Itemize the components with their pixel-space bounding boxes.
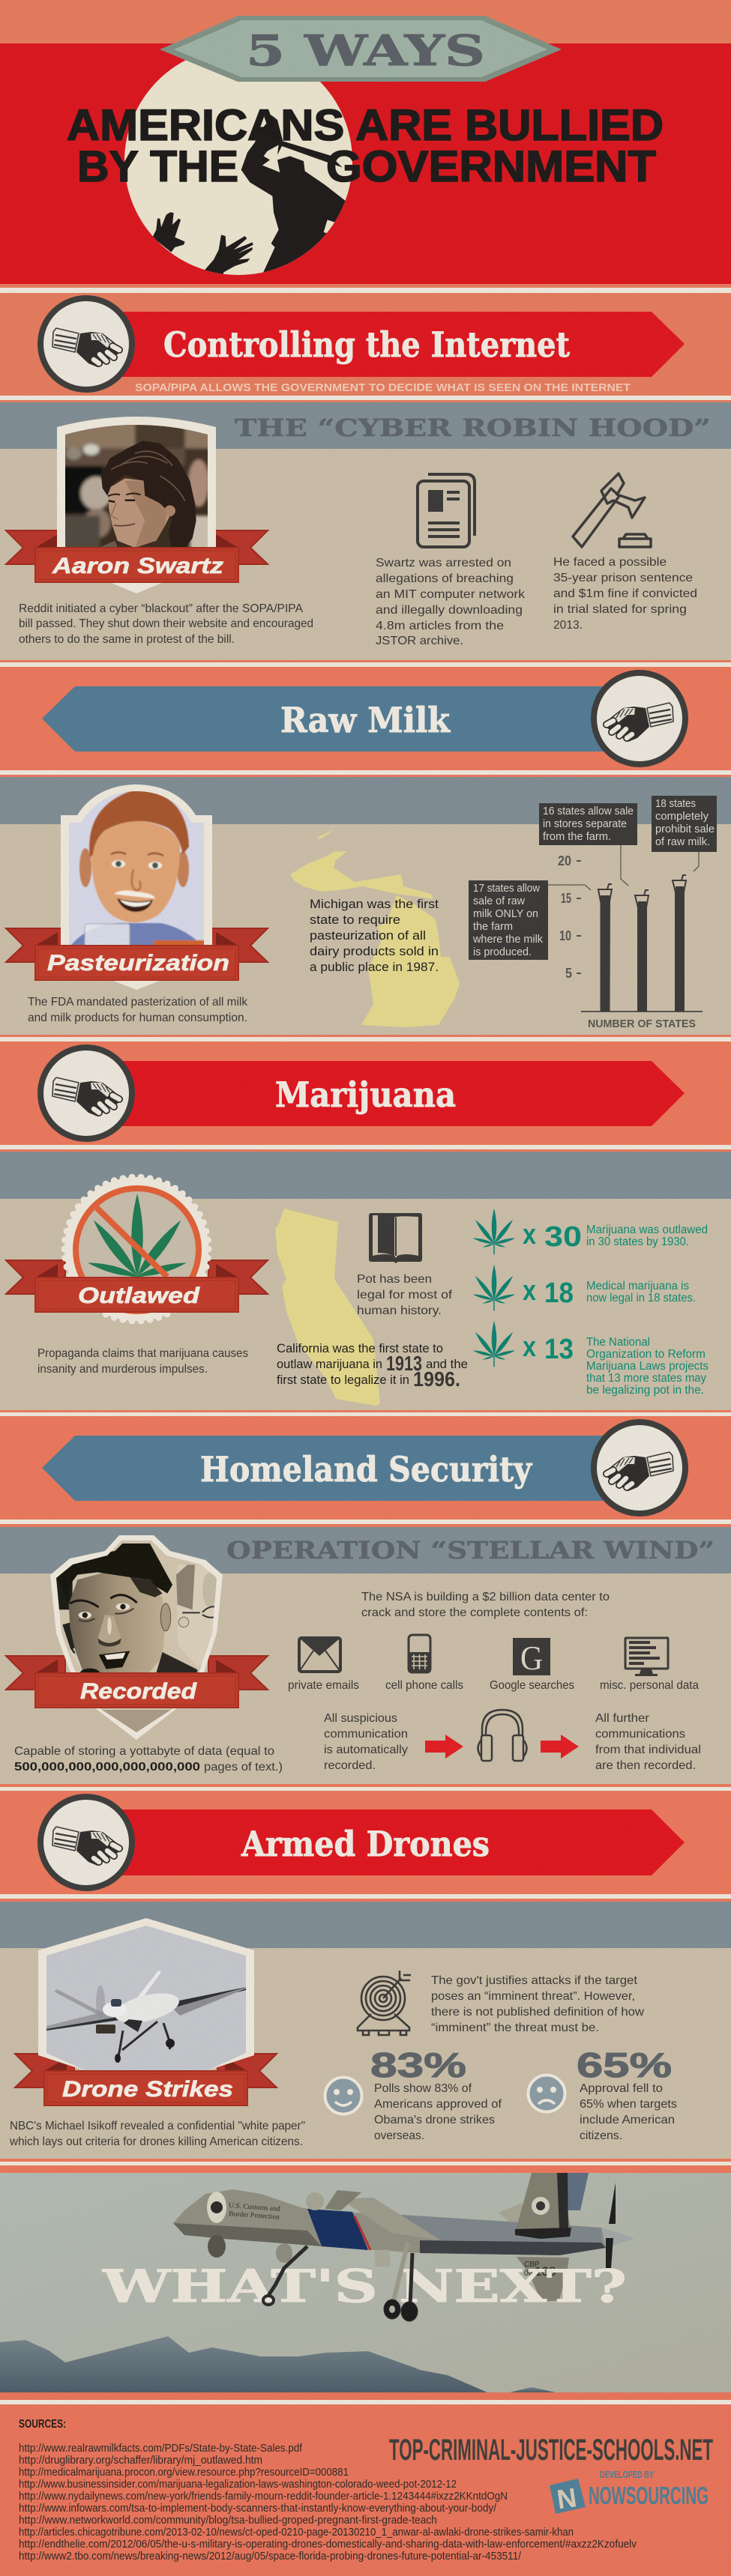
panel: cyber robin hood [0, 402, 731, 660]
text: propaganda: Propaganda claims that marijuana causes [37, 1347, 248, 1360]
icon: google searches [490, 1638, 574, 1692]
heading: Controlling the Internet [163, 324, 571, 365]
text: sentence [553, 556, 697, 632]
stat: 83% approval: Obama's drone strikes [374, 2114, 495, 2126]
text: sentence: 2013. [553, 619, 583, 632]
illustration: mountains [0, 2336, 556, 2392]
callout: 18 states: 18 states [655, 797, 696, 810]
stat: x 30: 30 [544, 1221, 582, 1253]
text: arrest [376, 557, 526, 647]
icon: personal data: misc. personal data [600, 1679, 699, 1692]
heading: sources: SOURCES: [19, 2418, 66, 2431]
logo: nowsourcing: N [555, 2482, 579, 2515]
callout: 18 states: of raw milk. [655, 835, 710, 848]
banner: 5 ways [160, 16, 562, 82]
icon: private emails: private emails [288, 1679, 359, 1692]
list: source urls: http://endthelie.com/2012/06/05/the-u-s-military-is-operating-drones-domestically-and-sharing-data-with-law-enforcement/#axzz2Kzofuelv [19, 2539, 637, 2551]
text: arrest: an MIT computer network [376, 588, 526, 601]
stat: 65% approval: include American [580, 2114, 675, 2126]
callout: 17 states: the farm [473, 920, 513, 933]
illustration: drone landing gear [263, 2243, 418, 2321]
callout: 16 states: 16 states allow sale [543, 805, 634, 817]
text: yottabyte: 500,000,000,000,000,000,000 [14, 1761, 200, 1774]
callout: 17 states [469, 880, 548, 960]
icon: frown [528, 2075, 565, 2111]
text: California: California was the first state to [277, 1341, 443, 1355]
icon: documents [418, 474, 475, 547]
stat: 83% approval: 83% [370, 2046, 466, 2084]
bar: 16 states [635, 890, 649, 1012]
text: further communications: communications [595, 1728, 685, 1741]
text: sentence: 35-year prison sentence [553, 572, 693, 584]
callout: 16 states: from the farm. [543, 830, 611, 843]
callout: 17 states: milk ONLY on [473, 907, 538, 920]
text: sentence: in trial slated for spring [553, 603, 687, 616]
bar chart: number of states [558, 853, 703, 1030]
callout: 16 states: in stores separate [543, 817, 627, 830]
text: arrest: Swartz was arrested on [376, 557, 511, 569]
text: imminent threat: “imminent” the threat must be. [431, 2022, 599, 2034]
callout: 17 states: where the milk [472, 933, 543, 946]
map: Michigan [290, 829, 460, 1027]
text: NSA [361, 1591, 610, 1619]
stat: x 18: Medical marijuana is [586, 1280, 689, 1292]
list: source urls: http://www.nydailynews.com/new-york/friends-family-mourn-reddit-founder-article-1.1243444#ixzz2KKntdOgN [19, 2491, 508, 2503]
ribbon: drone strikes: Drone Strikes [62, 2077, 233, 2102]
text: white paper: NBC's Michael Isikoff revealed a confidential "white paper" [10, 2120, 305, 2132]
icon: headphones [478, 1710, 526, 1761]
stat: x 13: be legalizing pot in the. [586, 1384, 704, 1397]
icon: private emails [288, 1638, 359, 1692]
text: pot history: Pot has been [357, 1273, 432, 1286]
icon: cell phone calls: cell phone calls [385, 1679, 463, 1692]
axis labels: 15 [561, 891, 571, 906]
text: FDA: The FDA mandated pasterization of all milk [28, 996, 248, 1009]
ribbon: drone strikes [44, 2071, 247, 2105]
subheading: SOPA/PIPA ALLOWS THE GOVERNMENT TO DECIDE WHAT IS SEEN ON THE INTERNET [135, 381, 631, 394]
icon: gavel [573, 474, 651, 547]
bar: 17 states [598, 884, 612, 1012]
stat: 65% approval: 65% [577, 2046, 672, 2084]
panel: homeland security header [0, 1410, 731, 1527]
illustration: border patrol drone: U.S. Customs and [229, 2202, 280, 2213]
stat: x 30: Marijuana was outlawed [586, 1224, 708, 1236]
panel: controlling the internet header [0, 284, 731, 402]
callout: 17 states: sale of raw [473, 895, 525, 907]
arrow [425, 1735, 463, 1759]
stat: 83% approval: Americans approved of [374, 2098, 502, 2111]
stat: x 13: Marijuana Laws projects [586, 1360, 709, 1373]
icon: fist badge [40, 1797, 132, 1888]
icon: target [358, 1971, 411, 2035]
ribbon: outlawed: Outlawed [78, 1284, 200, 1308]
text: California: 1913 [386, 1352, 422, 1375]
text: Michigan: dairy products sold in [310, 944, 439, 958]
stat: x 13 [472, 1320, 709, 1397]
callout: 18 states: completely [655, 810, 709, 823]
icon: fist badge [40, 1047, 132, 1139]
text: FDA: and milk products for human consumption. [28, 1012, 247, 1024]
stat: 65% approval: 65% when targets [580, 2098, 677, 2111]
text: NSA: The NSA is building a $2 billion data center to [361, 1591, 610, 1603]
list: source urls: http://www.infowars.com/tsa-to-implement-body-scanners-that-instantly-know-everything-about-your-body/ [19, 2503, 497, 2515]
text: Michigan: a public place in 1987. [310, 960, 439, 974]
stat: x 30: in 30 states by 1930. [586, 1236, 689, 1248]
ribbon: pasteurization [35, 946, 238, 980]
stat: x 13: x [523, 1331, 536, 1363]
stat: x 30 [472, 1208, 708, 1254]
text: arrest: allegations of breaching [376, 572, 514, 585]
panel: drone strikes [0, 1902, 731, 2159]
list: source urls: http://www.businessinsider.com/marijuana-legalization-laws-washington-colorado-weed-pot-2012-12 [19, 2479, 457, 2491]
photo: drone in hexagon [38, 1918, 254, 2102]
heading: Raw Milk [280, 700, 451, 740]
text: California: first state to legalize it in [277, 1373, 409, 1387]
text: white paper [9, 2120, 305, 2148]
ribbon: pasteurization: Pasteurization [47, 951, 229, 976]
text: California: 1996. [413, 1367, 460, 1391]
stat: 83% approval: overseas. [374, 2129, 424, 2142]
stat: x 18: x [523, 1275, 536, 1307]
icon: fist badge [594, 1422, 685, 1514]
stat: x 18: 18 [544, 1278, 574, 1309]
map: California [275, 1209, 380, 1406]
illustration: border patrol drone: CBP [524, 2261, 540, 2269]
text: further communications: All further [595, 1712, 650, 1725]
stat: x 18: now legal in 18 states. [586, 1292, 696, 1304]
ribbon: recorded [35, 1673, 238, 1708]
text: yottabyte: pages of text.) [204, 1761, 283, 1774]
icon: fist badge [40, 298, 132, 390]
icon: prohibited leaf badge [64, 1177, 208, 1321]
panel: stellar wind [0, 1527, 731, 1784]
text: FDA [28, 996, 248, 1024]
text: imminent threat: The gov't justifies attacks if the target [431, 1974, 638, 1987]
icon: book [369, 1213, 422, 1263]
ribbon: Aaron Swartz: Aaron Swartz [52, 554, 223, 578]
axis labels: 20 [558, 853, 571, 868]
text: yottabyte [14, 1745, 283, 1774]
heading: THE “CYBER ROBIN HOOD” [235, 414, 711, 442]
text: suspicious communication: communication [324, 1728, 408, 1741]
illustration: border patrol drone: 108 [535, 2264, 556, 2279]
list: source urls: http://druglibrary.org/schaffer/library/mj_outlawed.htm [19, 2455, 262, 2467]
text: sentence: and $1m fine if convicted [553, 587, 697, 600]
text: suspicious communication: All suspicious [324, 1712, 397, 1725]
text: arrest: JSTOR archive. [376, 635, 463, 647]
illustration: border patrol drone: 007 [524, 2270, 537, 2278]
callout: 18 states [652, 796, 717, 852]
text: propaganda: insanity and murderous impulses. [37, 1363, 208, 1376]
stat: 65% approval: citizens. [580, 2129, 622, 2142]
text: Michigan: Michigan was the first [310, 897, 439, 911]
bar: 18 states [673, 875, 686, 1012]
panel: armed drones header [0, 1784, 731, 1902]
text: pot history: human history. [357, 1304, 442, 1317]
icon: fist badge [594, 673, 685, 764]
text: Michigan: state to require [310, 913, 400, 927]
stat: x 13: 13 [544, 1334, 574, 1365]
text: white paper: which lays out criteria for drones killing American citizens. [9, 2135, 303, 2148]
stat: x 13: The National [586, 1336, 650, 1349]
text: reddit blackout: others to do the same in protest of the bill. [19, 633, 235, 646]
text: pot history [357, 1273, 453, 1317]
text: sentence: He faced a possible [553, 556, 667, 569]
ribbon: Aaron Swartz [35, 548, 238, 582]
list: source urls: http://www2.tbo.com/news/breaking-news/2012/aug/05/space-florida-probing-drones-future-potential-ar-453511/ [19, 2551, 522, 2563]
text: pot history: legal for most of [357, 1289, 453, 1301]
heading: OPERATION “STELLAR WIND” [226, 1536, 715, 1564]
callout: 17 states: is produced. [473, 946, 532, 958]
list: source urls: http://medicalmarijuana.procon.org/view.resource.php?resourceID=000881 [19, 2467, 349, 2479]
callout: 16 states [539, 803, 637, 845]
text: imminent threat: poses an “imminent threat”. However, [431, 1990, 635, 2003]
icon: cell phone calls [385, 1635, 463, 1692]
axis labels [558, 853, 581, 981]
text: yottabyte: Capable of storing a yottabyte of data (equal to [14, 1745, 274, 1758]
heading: what's next: WHAT'S NEXT? [102, 2261, 627, 2313]
text: further communications: from that individual [595, 1744, 701, 1756]
logo: nowsourcing [550, 2470, 709, 2515]
text: suspicious communication: recorded. [324, 1759, 376, 1772]
icon: personal data [600, 1638, 699, 1692]
ribbon: outlawed [35, 1278, 238, 1312]
list: source urls [19, 2443, 637, 2563]
text: Michigan: pasteurization of all [310, 928, 426, 943]
axis labels: 10 [559, 928, 571, 943]
logo: nowsourcing: DEVELOPED BY [600, 2470, 654, 2480]
text: reddit blackout: Reddit initiated a cyber “blackout” after the SOPA/PIPA [19, 602, 303, 615]
text: California: and the [426, 1357, 468, 1371]
title [67, 101, 664, 191]
heading: Marijuana [275, 1074, 456, 1115]
panel: marijuana header [0, 1035, 731, 1152]
title: GOVERNMENT [326, 142, 656, 191]
title: BY THE [77, 142, 238, 191]
stat: x 18 [472, 1265, 696, 1310]
stat: 65% approval [528, 2046, 677, 2142]
text: NSA: crack and store the complete contents of: [361, 1606, 588, 1619]
text: further communications [595, 1712, 701, 1772]
stat: 65% approval: Approval fell to [580, 2082, 663, 2095]
axis labels: 5 [565, 966, 572, 981]
illustration: border patrol drone: Border Protection [229, 2210, 280, 2222]
callout: 18 states: prohibit sale [655, 823, 715, 835]
illustration: border patrol drone [173, 2173, 634, 2302]
stat: x 13: that 13 more states may [586, 1372, 706, 1385]
ribbon: recorded: Recorded [80, 1679, 197, 1704]
panel: raw milk header [0, 660, 731, 777]
portrait: wiretapper [49, 1535, 223, 1740]
list: source urls: http://www.networkworld.com/community/blog/tsa-bullied-groped-pregnant-first-grade-teach [19, 2515, 437, 2527]
text: reddit blackout [19, 602, 313, 646]
arrow [541, 1735, 579, 1759]
icon: google searches: G [520, 1639, 543, 1677]
callout: 17 states: 17 states allow [473, 882, 540, 895]
icon: raised hands [152, 212, 253, 277]
stat: x 13: Organization to Reform [586, 1348, 706, 1361]
text: imminent threat: there is not published definition of how [431, 2006, 644, 2019]
illustration: riot cop in circle [124, 47, 352, 282]
banner: 5 ways: 5 WAYS [246, 26, 485, 76]
stat: 83% approval: Polls show 83% of [374, 2082, 472, 2095]
text: California: outlaw marijuana in [277, 1357, 382, 1371]
text: suspicious communication [324, 1712, 408, 1772]
list: source urls: http://articles.chicagotribune.com/2013-02-10/news/ct-oped-0210-page-20130210_1_anwar-al-awlaki-drone-strikes-samir-khan [19, 2527, 574, 2539]
panel: sources footer [0, 2392, 731, 2576]
title: AMERICANS ARE BULLIED [67, 101, 664, 150]
text: suspicious communication: is automatically [324, 1744, 408, 1756]
text: propaganda [37, 1347, 248, 1376]
panel: what's next [0, 2159, 731, 2392]
text: arrest: and illegally downloading [376, 604, 523, 617]
portrait: milk boy [61, 784, 212, 990]
stat: 83% approval [325, 2046, 502, 2142]
panel: outlawed [0, 1152, 731, 1410]
stat: x 30: x [523, 1219, 536, 1251]
icon: smiley [325, 2077, 361, 2114]
text: arrest: 4.8m articles from the [376, 620, 504, 632]
heading: Homeland Security [200, 1449, 532, 1490]
icon: google searches: Google searches [490, 1679, 574, 1692]
text: Michigan [310, 897, 439, 974]
panel: title header [0, 0, 731, 284]
heading: Armed Drones [241, 1824, 490, 1864]
text: imminent threat [431, 1974, 644, 2034]
panel: pasteurization [0, 777, 731, 1035]
text: California [277, 1341, 468, 1391]
portrait: Aaron Swartz [57, 416, 216, 593]
text: reddit blackout: bill passed. They shut down their website and encouraged [19, 617, 313, 630]
bar chart: number of states: NUMBER OF STATES [588, 1018, 696, 1030]
list: source urls: http://www.realrawmilkfacts.com/PDFs/State-by-State-Sales.pdf [19, 2443, 303, 2455]
text: further communications: are then recorded. [595, 1759, 696, 1772]
